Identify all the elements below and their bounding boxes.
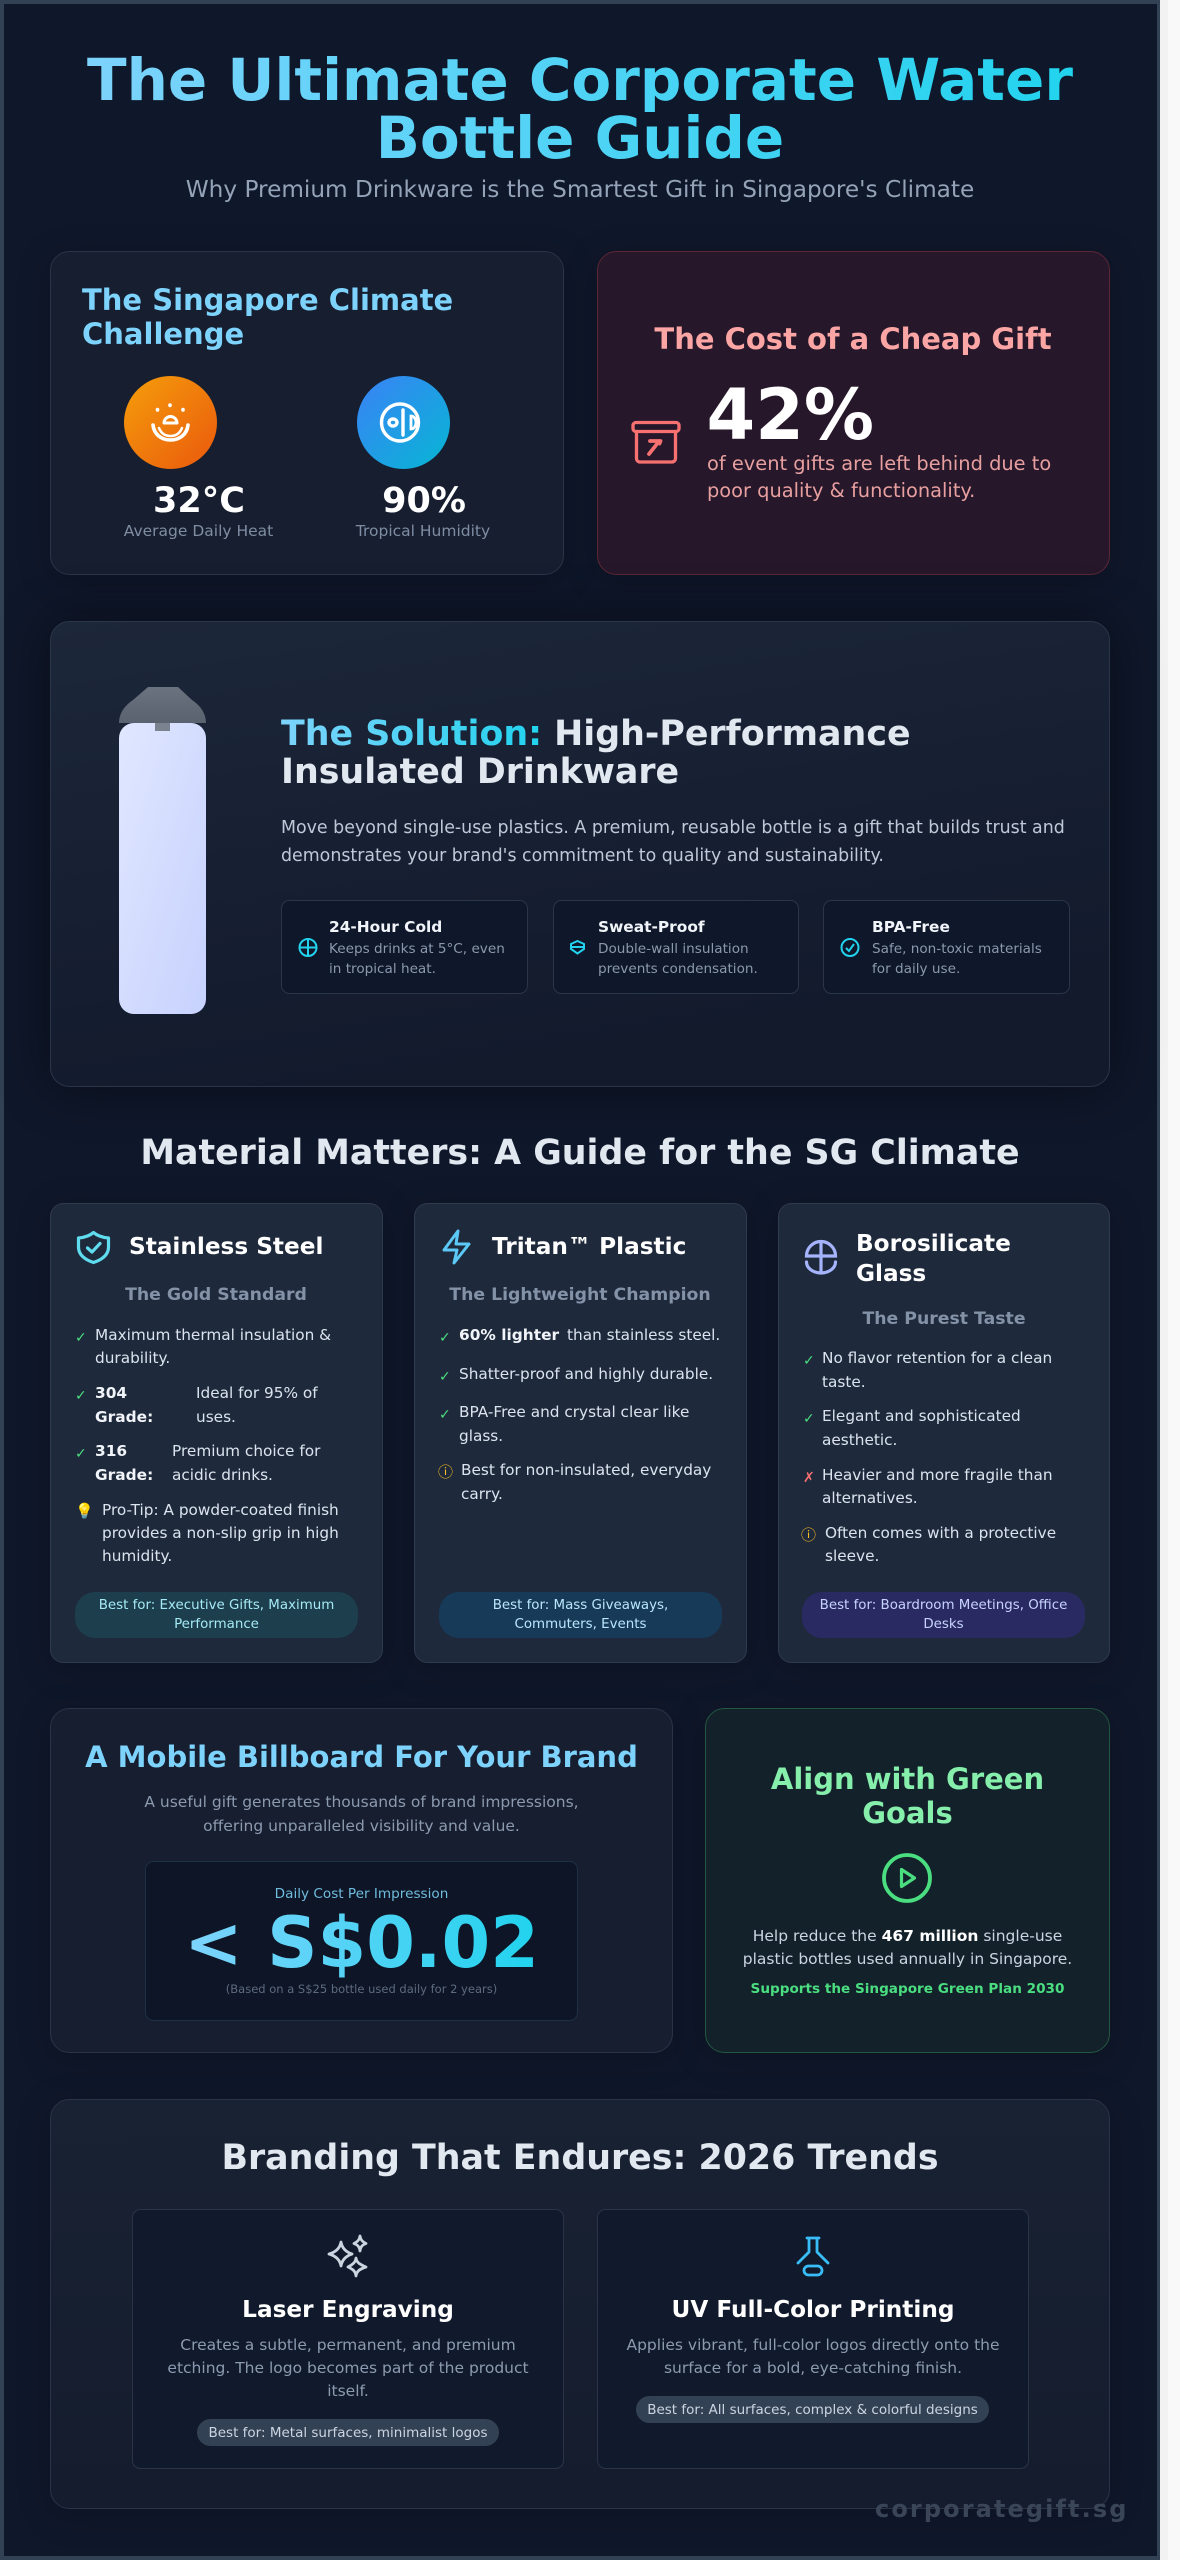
subheading: gold standard: The Gold Standard [125,1285,307,1305]
list: stainless steel points [75,1326,339,1565]
heading: solution: The Solution: High-Performance [281,714,911,754]
title [87,46,1073,172]
list: glass points: alternatives. [822,1489,918,1507]
list: tritan points: carry. [461,1485,503,1503]
list: stainless steel points: 304 [95,1384,127,1402]
tag: best for executive gifts: Best for: Executive Gifts, Maximum [99,1598,334,1613]
text: cost description: of event gifts are left behind due to [707,452,1051,475]
list: stainless steel points: ✓ [75,1446,87,1462]
heading: borosilicate glass: Glass [856,1260,926,1287]
text: solution description: Move beyond single-use plastics. A premium, reusable bottle is a gift that builds trust and [281,818,1065,838]
tag: best for boardroom meetings: Desks [923,1617,964,1632]
heading: solution [281,714,911,792]
list: glass points: aesthetic. [822,1431,897,1449]
stat: 32 degrees [124,481,273,540]
text: solution description: demonstrates your brand's commitment to quality and sustainability. [281,846,884,866]
feature: BPA-free: for daily use. [872,961,960,977]
icon: play circle [884,1855,930,1901]
icon: glass globe [806,1242,836,1273]
icon: sun heat [124,376,217,469]
panel: branding trends [50,2100,1110,2508]
heading: cost: The Cost of a Cheap Gift [654,322,1052,356]
list: stainless steel points: durability. [95,1349,170,1367]
list: glass points [801,1349,1056,1565]
list: stainless steel points: Grade: [95,1466,153,1484]
list: stainless steel points: humidity. [102,1547,172,1565]
card: laser engraving: etching. The logo becomes part of the product [167,2359,529,2377]
callout: daily cost per impression: < S$0.02 [184,1902,539,1984]
list: tritan points [438,1326,720,1503]
panel: stainless steel [50,1204,382,1662]
icon: archive box [633,422,679,462]
panel: the solution [50,622,1110,1086]
list: stainless steel points: uses. [196,1408,236,1426]
tag: best for mass giveaways: Best for: Mass Giveaways, [493,1598,668,1613]
heading: climate challenge [82,283,453,351]
list: tritan points: Shatter-proof and highly durable. [459,1365,713,1383]
heading: climate challenge: Challenge [82,317,244,351]
feature: BPA-free: Safe, non-toxic materials [872,941,1042,957]
list: glass points: Heavier and more fragile than [822,1466,1053,1484]
card: laser engraving: Creates a subtle, permanent, and premium [180,2336,516,2354]
title: The Ultimate Corporate Water [87,46,1073,114]
feature: BPA-free [824,900,1070,994]
card: laser engraving: Laser Engraving [242,2296,454,2323]
list: stainless steel points: Maximum thermal insulation & [95,1326,331,1344]
list: tritan points: Best for non-insulated, everyday [461,1461,711,1479]
list: stainless steel points: Pro-Tip: A powder-coated finish [102,1501,339,1519]
card: uv printing: surface for a bold, eye-catching finish. [664,2359,962,2377]
card: uv printing [598,2210,1028,2468]
icon: humidity [357,376,450,469]
icon: sparkles [329,2236,366,2276]
text: green description: Help reduce the 467 million single-use [753,1927,1062,1945]
list: tritan points: glass. [459,1427,503,1445]
heading: green goals [771,1762,1044,1830]
list: stainless steel points: 💡 [75,1502,94,1520]
tag: best for metal surfaces [197,2419,499,2446]
card: laser engraving [132,2210,564,2468]
tag: best for boardroom meetings: Best for: Boardroom Meetings, Office [820,1598,1067,1613]
list: tritan points: ✓ [439,1369,451,1385]
list: tritan points: 60% lighter [459,1326,560,1344]
feature: sweat-proof [554,900,798,994]
list: stainless steel points: Premium choice for [172,1442,321,1460]
panel: climate challenge [50,252,564,574]
feature: sweat-proof: Sweat-Proof [598,918,705,936]
stat: 32 degrees: 32°C [153,481,245,521]
panel: borosilicate glass [778,1204,1110,1662]
heading: green goals: Goals [862,1796,953,1830]
heading: mobile billboard: A Mobile Billboard For Your Brand [85,1740,638,1774]
list: glass points: ✓ [803,1353,815,1369]
text: billboard description [144,1793,579,1835]
panel: mobile billboard [50,1708,672,2052]
callout: daily cost per impression: Daily Cost Per Impression [275,1886,448,1902]
tag: best for executive gifts: Performance [174,1617,259,1632]
text: cost description [707,452,1051,502]
list: tritan points: BPA-Free and crystal clear like [459,1403,689,1421]
list: glass points: No flavor retention for a clean [822,1349,1052,1367]
bottle illustration [119,687,206,1014]
list: stainless steel points: 316 [95,1442,127,1460]
icon: lightning bolt [444,1231,469,1263]
tag: best for mass giveaways [439,1592,722,1638]
text: green description: plastic bottles used annually in Singapore. [743,1950,1072,1968]
card: uv printing: Applies vibrant, full-color logos directly onto the [626,2336,1000,2354]
text: green description [743,1927,1072,1968]
feature: 24-hour cold [282,900,528,994]
list: glass points: sleeve. [825,1547,879,1565]
icon: check circle [842,939,858,956]
list: stainless steel points: Grade: [95,1408,153,1426]
icon: flask [798,2238,828,2275]
callout: daily cost per impression [146,1862,578,2020]
title: Bottle Guide [376,104,784,172]
heading: material matters: Material Matters: A Guide for the SG Climate [140,1133,1020,1173]
card: uv printing: UV Full-Color Printing [672,2296,954,2323]
tag: best for all surfaces [636,2396,989,2423]
feature: 24-hour cold: in tropical heat. [329,961,436,977]
stat: 90 percent [355,481,490,540]
heading: stainless steel: Stainless Steel [129,1233,323,1260]
list: stainless steel points: ✓ [75,1388,87,1404]
callout: daily cost per impression: (Based on a S$25 bottle used daily for 2 years) [226,1982,497,1996]
card: laser engraving: itself. [327,2382,369,2400]
tag: best for metal surfaces: Best for: Metal surfaces, minimalist logos [208,2425,488,2441]
heading: branding: Branding That Endures: 2026 Trends [221,2138,939,2178]
icon: plus circle [300,939,316,956]
feature: 24-hour cold: Keeps drinks at 5°C, even [329,941,505,957]
note: singapore green plan: Supports the Singapore Green Plan 2030 [751,1981,1064,1997]
subtitle: Why Premium Drinkware is the Smartest Gift in Singapore's Climate [186,176,974,203]
panel: tritan plastic [414,1204,746,1662]
tag: best for mass giveaways: Commuters, Events [515,1617,646,1632]
text: billboard description: A useful gift generates thousands of brand impressions, [144,1793,579,1811]
text: solution description [281,818,1065,866]
stat: 90 percent: Tropical Humidity [355,522,490,540]
icon: hexagon badge [571,941,584,954]
subheading: lightweight champion: The Lightweight Champion [449,1285,711,1305]
list: tritan points: ✓ [439,1330,451,1346]
heading: tritan plastic: Tritan™ Plastic [492,1233,686,1260]
list: tritan points: than stainless steel. [567,1326,720,1344]
subheading: purest taste: The Purest Taste [862,1309,1026,1329]
watermark: corporategift.sg [875,2495,1129,2523]
feature: sweat-proof: Double-wall insulation [598,941,749,957]
heading: climate challenge: The Singapore Climate [82,283,453,317]
stat: 32 degrees: Average Daily Heat [124,522,273,540]
icon: shield check [78,1232,108,1262]
tag: best for executive gifts [75,1592,358,1638]
tag: best for all surfaces: Best for: All surfaces, complex & colorful designs [647,2402,978,2418]
stat: 42 percent: 42% [706,374,874,456]
list: stainless steel points: acidic drinks. [172,1466,273,1484]
feature: BPA-free: BPA-Free [872,918,950,936]
list: glass points: taste. [822,1373,866,1391]
panel: green goals [706,1708,1110,2052]
tag: best for boardroom meetings [802,1592,1085,1638]
list: glass points: Often comes with a protective [825,1524,1056,1542]
panel: cost of a cheap gift [598,252,1110,574]
list: tritan points: ⓘ [438,1463,453,1481]
list: glass points: Elegant and sophisticated [822,1407,1021,1425]
heading: green goals: Align with Green [771,1762,1044,1796]
list: tritan points: ✓ [439,1407,451,1423]
list: glass points: ✗ [803,1470,815,1486]
heading: solution: Insulated Drinkware [281,752,679,792]
feature: 24-hour cold: 24-Hour Cold [329,918,442,936]
list: glass points: ✓ [803,1411,815,1427]
list: stainless steel points: Ideal for 95% of [196,1384,318,1402]
feature: sweat-proof: prevents condensation. [598,961,758,977]
list: glass points: ⓘ [801,1526,816,1544]
list: stainless steel points: provides a non-slip grip in high [102,1524,339,1542]
heading: borosilicate glass: Borosilicate [856,1230,1011,1257]
text: cost description: poor quality & functionality. [707,479,975,502]
stat: 90 percent: 90% [382,481,466,521]
text: billboard description: offering unparalleled visibility and value. [203,1817,520,1835]
heading: borosilicate glass [856,1230,1011,1287]
list: stainless steel points: ✓ [75,1330,87,1346]
